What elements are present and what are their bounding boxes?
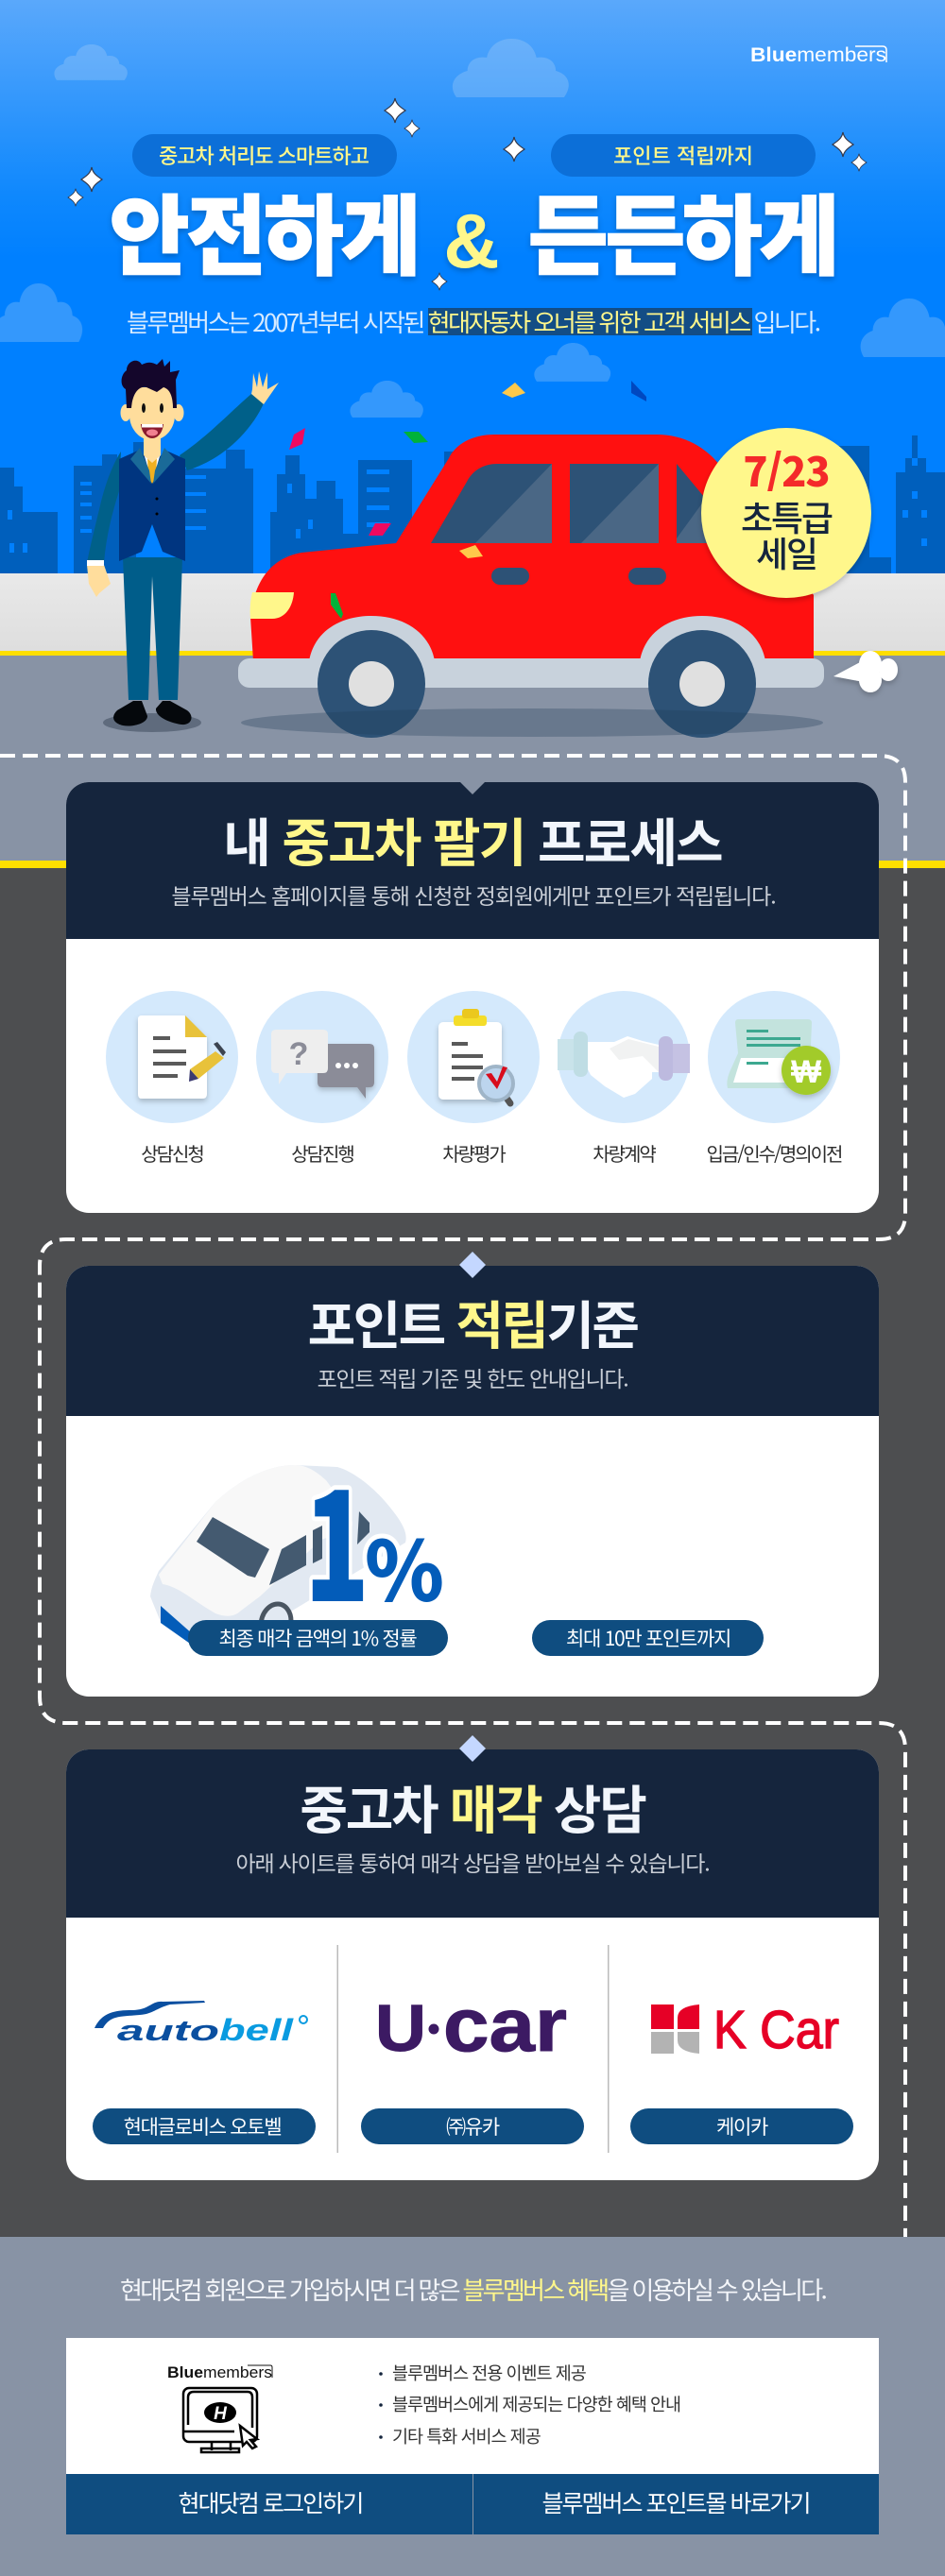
label: step 1: 상담신청	[141, 1139, 203, 1167]
diamond marker: consultation section	[459, 1735, 486, 1762]
skyline buildings	[0, 435, 945, 573]
car: window highlights	[475, 464, 723, 543]
icon: clipboard with magnifier	[407, 991, 540, 1123]
man: jacket	[119, 451, 185, 561]
man: shoes	[113, 701, 147, 726]
footer heading: 현대닷컴 회원으로 가입하시면 더 많은 블루멤버스 혜택을 이용하실 수 있습니다.	[120, 2272, 826, 2307]
panel body	[66, 1266, 879, 1697]
benefits list	[379, 2361, 680, 2448]
car: windows	[431, 464, 723, 543]
icon: monitor with cursor	[183, 2388, 257, 2452]
sale badge: 세일	[756, 526, 816, 577]
heading: 포인트 적립기준	[308, 1284, 638, 1359]
car: headlight	[250, 592, 294, 619]
exhaust puff	[833, 651, 898, 692]
car: confetti on body	[331, 593, 343, 619]
man: far arm	[87, 452, 121, 563]
illustration: 1 percent	[304, 1428, 444, 1645]
man: hands	[87, 371, 279, 597]
benefits list: 블루멤버스 전용 이벤트 제공	[392, 2361, 586, 2385]
car: door handles	[491, 568, 529, 585]
label: step 3: 차량평가	[442, 1139, 506, 1167]
pill: U-car: ㈜유카	[446, 2112, 500, 2141]
man: eyes and mouth	[142, 403, 146, 413]
pill: left tagline	[132, 134, 397, 177]
panel: process card	[66, 782, 879, 1213]
logo: U-car: U	[375, 1991, 426, 2065]
main title	[110, 167, 836, 293]
logo: autobell: auto	[117, 2014, 219, 2047]
pill: max points: 최대 10만 포인트까지	[566, 1624, 730, 1652]
illustration: car	[150, 1465, 406, 1646]
panel body	[66, 1749, 879, 2180]
skyline windows	[8, 458, 927, 553]
icon: handshake	[558, 991, 690, 1123]
small brand logo: Bluemembers	[167, 2363, 272, 2381]
main title: 든든하게	[528, 167, 836, 293]
dividers	[336, 1945, 609, 2153]
man: cuffs	[87, 560, 104, 566]
man: face	[144, 430, 161, 463]
panel: points criteria card	[66, 1266, 879, 1697]
button: point mall	[473, 2474, 879, 2534]
sparkles	[68, 98, 867, 290]
button: point mall: 블루멤버스 포인트몰 바로가기	[541, 2485, 810, 2519]
brand logo: Bluemembers	[750, 43, 886, 66]
icon: bankbook with won coin	[708, 991, 840, 1123]
benefits box	[66, 2338, 879, 2474]
car: wheels	[318, 630, 756, 738]
logo: U-car: car	[443, 1983, 567, 2067]
illustration: 1 percent: 1	[304, 1428, 369, 1645]
man: pants	[123, 557, 182, 700]
main title: &	[443, 198, 500, 284]
pill: autobell: 현대글로비스 오토벨	[124, 2112, 281, 2141]
car: ground shadow	[241, 708, 823, 737]
arrow: dashed flow path	[0, 756, 905, 2237]
icon: application document	[106, 991, 238, 1123]
panel: sale consultation card	[66, 1749, 879, 2180]
pill: autobell	[93, 2108, 316, 2144]
character: waving man	[87, 359, 279, 732]
button: login	[66, 2474, 472, 2534]
clouds	[0, 39, 945, 418]
pill: 1 percent rate: 최종 매각 금액의 1% 정률	[219, 1624, 417, 1652]
brand logo bracket	[855, 46, 886, 62]
subheading: 아래 사이트를 통하여 매각 상담을 받아보실 수 있습니다.	[236, 1846, 709, 1878]
pill: K Car	[630, 2108, 853, 2144]
diamond marker: points section	[459, 1252, 486, 1278]
logo: U-car	[375, 1983, 567, 2067]
pill: left tagline: 중고차 처리도 스마트하고	[159, 140, 369, 170]
hero: sky background	[0, 0, 945, 573]
man: lapels and tie	[144, 444, 161, 482]
car: bumper	[238, 658, 824, 688]
sale badge: 초특급	[741, 490, 833, 541]
heading: 중고차 매각 상담	[300, 1768, 646, 1844]
car: wheel arches	[309, 616, 765, 661]
label: step 5: 입금/인수/명의이전	[707, 1139, 842, 1167]
man: hair	[122, 359, 180, 408]
road: curb, lines, asphalt	[0, 573, 945, 868]
subheading: 블루멤버스 홈페이지를 통해 신청한 정회원에게만 포인트가 적립됩니다.	[171, 879, 776, 911]
button: login: 현대닷컴 로그인하기	[178, 2485, 363, 2519]
pill: right tagline: 포인트 적립까지	[613, 140, 753, 170]
benefits list: 기타 특화 서비스 제공	[392, 2424, 541, 2448]
footer panel	[0, 2237, 945, 2576]
logo: K Car: K Car	[713, 2000, 839, 2060]
pill: max points	[532, 1620, 764, 1656]
icon: monitor with cursor: H	[214, 2404, 228, 2424]
illustration: 1 percent: %	[365, 1506, 444, 1626]
logo: autobell	[94, 2001, 307, 2047]
icon: speech bubbles: ?	[289, 1036, 308, 1072]
label: step 4: 차량계약	[593, 1139, 656, 1167]
main title: 안전하게	[110, 167, 418, 293]
confetti	[289, 381, 646, 536]
icon: bankbook with won coin: ₩	[791, 1054, 822, 1090]
sale badge: 7/23	[743, 440, 830, 499]
pill: right tagline	[551, 134, 816, 177]
car	[238, 435, 824, 738]
icon: speech bubbles	[256, 991, 388, 1123]
shadow under man	[103, 713, 201, 732]
pill: 1 percent rate	[188, 1620, 448, 1656]
pill: K Car: 케이카	[716, 2112, 768, 2141]
subheading: 포인트 적립 기준 및 한도 안내입니다.	[318, 1361, 627, 1393]
heading: 내 중고차 팔기 프로세스	[223, 801, 722, 877]
benefits list: 블루멤버스에게 제공되는 다양한 혜택 안내	[392, 2392, 680, 2416]
man: raised arm	[180, 394, 264, 470]
label: step 2: 상담진행	[291, 1139, 353, 1167]
logo: K Car	[651, 2000, 839, 2060]
hero subtitle: 블루멤버스는 2007년부터 시작된 현대자동차 오너를 위한 고객 서비스 입니다.	[127, 304, 820, 339]
logo: autobell: bell	[219, 2013, 295, 2047]
notch	[460, 782, 485, 794]
pill: U-car	[361, 2108, 584, 2144]
car: body	[250, 435, 814, 661]
sale badge	[701, 428, 871, 598]
panel body	[66, 782, 879, 1213]
